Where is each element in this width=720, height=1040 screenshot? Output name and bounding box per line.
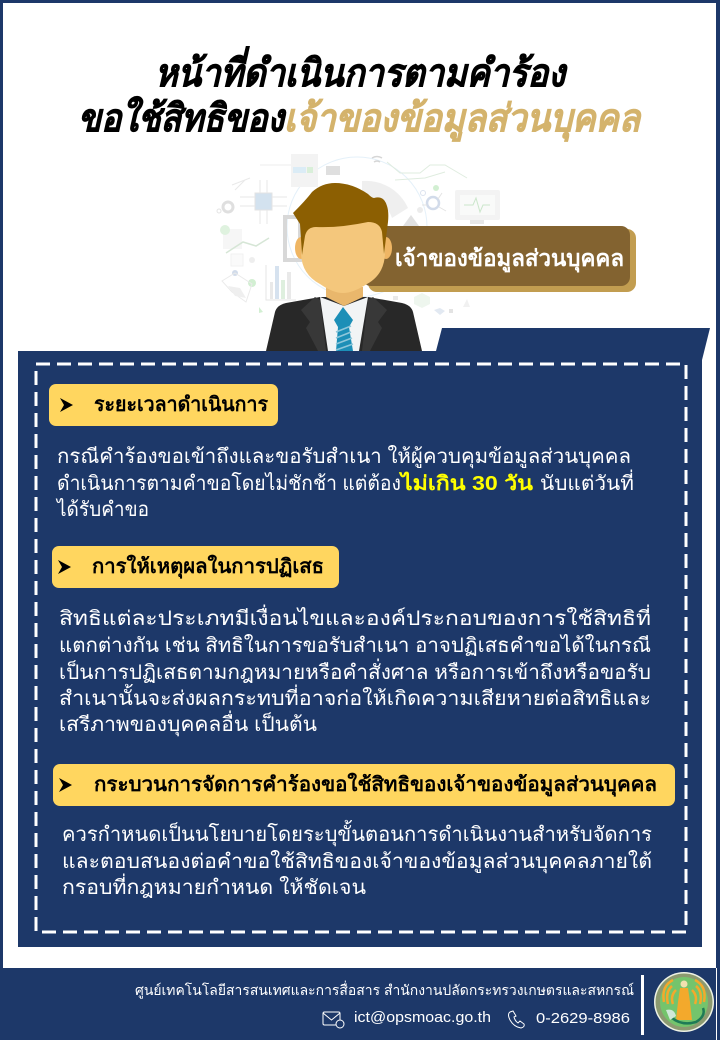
background data icons bbox=[217, 154, 500, 315]
title: ขอใช้สิทธิของ bbox=[78, 96, 287, 140]
title: หน้าที่ดำเนินการตามคำร้อง bbox=[155, 46, 568, 95]
title: เจ้าของข้อมูลส่วนบุคคล bbox=[284, 98, 642, 142]
panel: main navy panel bbox=[18, 328, 710, 947]
dashed frame bbox=[36, 364, 686, 932]
phone number: 0-2629-8986 bbox=[536, 1010, 630, 1027]
section 3: request handling process: กรอบที่กฎหมายกำหนด ให้ชัดเจน bbox=[62, 873, 366, 899]
label badge bbox=[362, 226, 636, 292]
organisation name: ศูนย์เทคโนโลยีสารสนเทศและการสื่อสาร สำนักงานปลัดกระทรวงเกษตรและสหกรณ์ bbox=[135, 981, 634, 999]
section 2: reasons for refusal: สำเนานั้นจะส่งผลกระทบที่อาจก่อให้เกิดความเสียหายต่อสิทธิและ bbox=[59, 684, 651, 710]
footer bar bbox=[0, 968, 720, 1040]
section 3: request handling process bbox=[53, 764, 675, 899]
email address: ict@opsmoac.go.th bbox=[354, 1009, 491, 1026]
icon: person bbox=[266, 183, 422, 351]
section 1: timeframe bbox=[49, 384, 634, 521]
section 2: reasons for refusal: สิทธิแต่ละประเภทมีเงื่อนไขและองค์ประกอบของการใช้สิทธิที่ bbox=[59, 604, 651, 630]
icon: email bbox=[323, 1012, 344, 1028]
section 2: reasons for refusal: การให้เหตุผลในการปฏิเสธ bbox=[92, 554, 324, 579]
section 3: request handling process: ควรกำหนดเป็นนโยบายโดยระบุขั้นตอนการดำเนินงานสำหรับจัดการ bbox=[62, 820, 652, 847]
section 1: timeframe: ไม่เกิน 30 วัน bbox=[399, 471, 533, 495]
section 2: reasons for refusal: เป็นการปฏิเสธตามกฎหมายหรือคำสั่งศาล หรือการเข้าถึงหรือขอรับ bbox=[59, 658, 651, 684]
section 1: timeframe: ระยะเวลาดำเนินการ bbox=[94, 394, 268, 416]
title bbox=[78, 46, 642, 142]
section 1: timeframe: ดำเนินการตามคำขอโดยไม่ชักช้า แต่ต้อง bbox=[57, 472, 401, 495]
icon: ministry seal bbox=[654, 972, 714, 1032]
section 1: timeframe: ได้รับคำขอ bbox=[55, 498, 149, 521]
section 3: request handling process: กระบวนการจัดการคำร้องขอใช้สิทธิของเจ้าของข้อมูลส่วนบุคคล bbox=[94, 772, 657, 798]
section 2: reasons for refusal bbox=[52, 546, 651, 737]
section 1: timeframe: นับแต่วันที่ bbox=[540, 469, 634, 495]
section 1: timeframe: กรณีคำร้องขอเข้าถึงและขอรับสำเนา ให้ผู้ควบคุมข้อมูลส่วนบุคคล bbox=[57, 445, 631, 469]
label badge: เจ้าของข้อมูลส่วนบุคคล bbox=[395, 245, 624, 273]
section 2: reasons for refusal: แตกต่างกัน เช่น สิทธิในการขอรับสำเนา อาจปฏิเสธคำขอได้ในกรณี bbox=[59, 634, 651, 657]
footer divider bbox=[641, 975, 644, 1035]
section 2: reasons for refusal: เสรีภาพของบุคคลอื่น เป็นต้น bbox=[59, 710, 317, 737]
section 3: request handling process: และตอบสนองต่อคำขอใช้สิทธิของเจ้าของข้อมูลส่วนบุคคลภายใต้ bbox=[62, 850, 652, 874]
icon: phone bbox=[508, 1011, 524, 1028]
